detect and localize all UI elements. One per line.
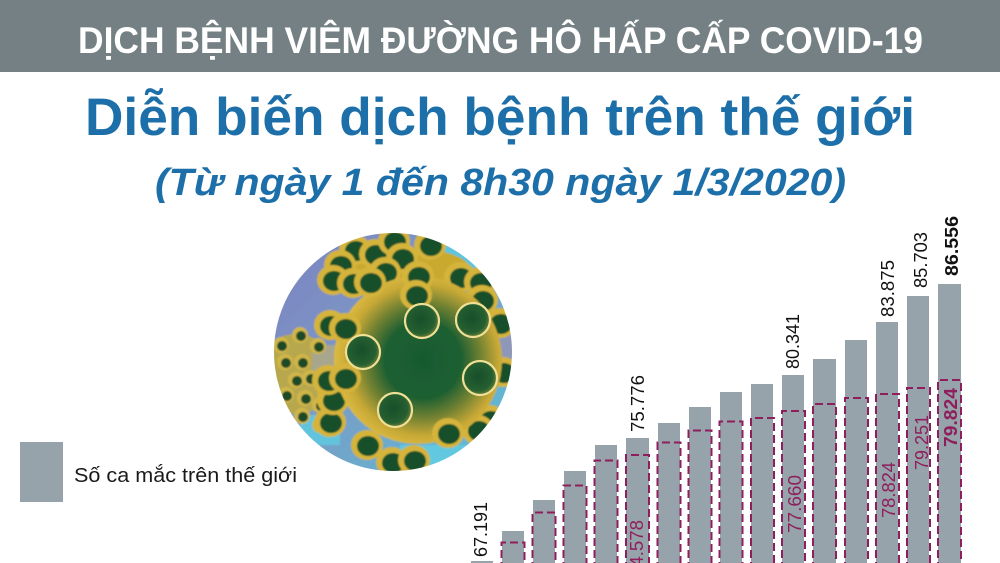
world totals: 67.191 — [471, 502, 491, 557]
grey bars — [471, 284, 961, 563]
header band — [0, 0, 1000, 72]
world totals: 80.341 — [783, 314, 803, 369]
world totals: 86.556 — [942, 216, 962, 276]
legend label: Số ca mắc trên thế giới — [74, 464, 297, 487]
legend swatch — [20, 442, 63, 502]
bar chart — [471, 216, 962, 563]
header title: DỊCH BỆNH VIÊM ĐƯỜNG HÔ HẤP CẤP COVID-19 — [78, 19, 923, 61]
main heading: Diễn biến dịch bệnh trên thế giới — [85, 87, 915, 147]
world totals — [471, 216, 962, 557]
dashed outlines — [502, 380, 961, 563]
China totals: 78.824 — [879, 462, 899, 518]
spikes — [338, 236, 368, 264]
date subtitle: (Từ ngày 1 đến 8h30 ngày 1/3/2020) — [155, 162, 846, 204]
small virus left — [274, 334, 320, 415]
world totals: 83.875 — [878, 260, 898, 317]
China totals: 79.251 — [912, 415, 932, 470]
virus image — [274, 233, 512, 471]
yellow body behind top spikes — [354, 248, 469, 282]
China totals: 77.660 — [785, 475, 805, 533]
China totals — [627, 388, 961, 563]
China totals: 79.824 — [941, 388, 961, 447]
legend — [20, 442, 297, 502]
world totals: 85.703 — [911, 232, 931, 288]
world totals: 75.776 — [628, 375, 648, 432]
